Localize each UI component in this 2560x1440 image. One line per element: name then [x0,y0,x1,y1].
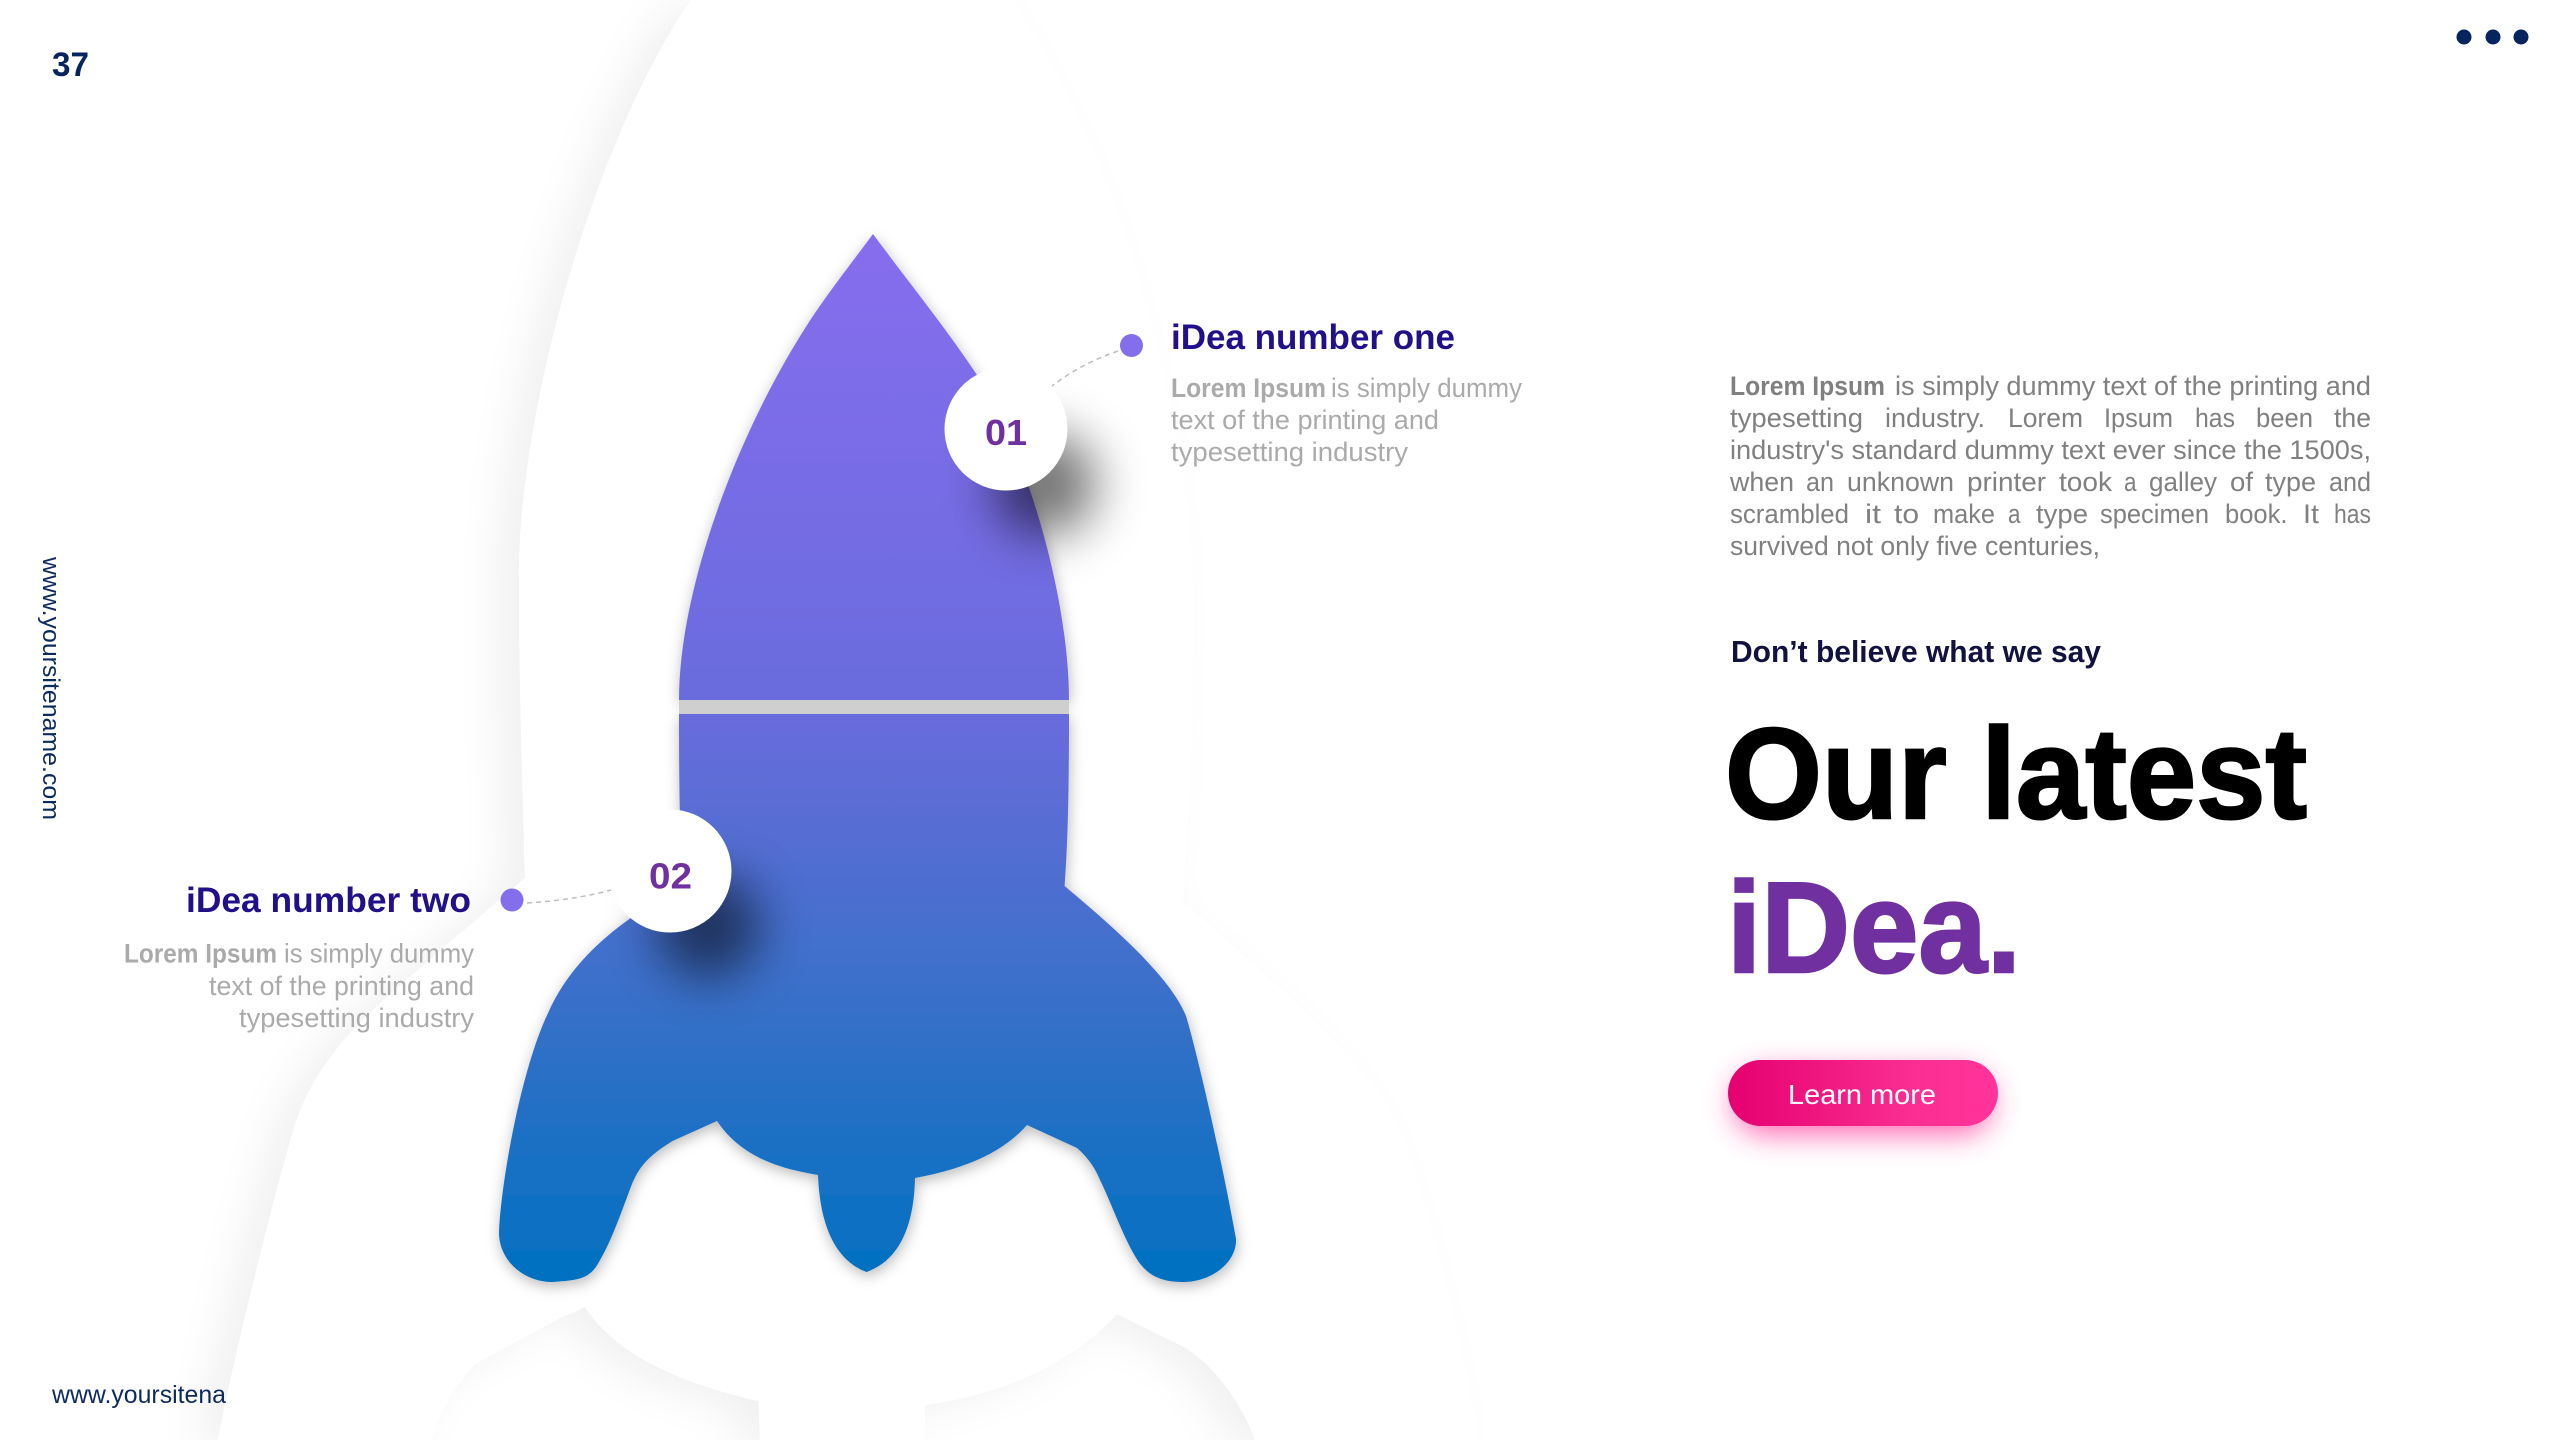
callout: idea two [124,881,475,1033]
description paragraph: unknown [1847,467,1954,497]
description paragraph: is simply dummy text of the printing and [1895,371,2371,401]
background: large white rocket with soft shadow [218,0,1478,1440]
description paragraph: industry's standard dummy text ever since the 1500s, [1730,435,2371,465]
rocket nose section [679,234,1069,700]
circle shadow 02 [656,874,760,978]
description paragraph: make [1933,499,1995,529]
callout: idea two: is simply dummy [284,938,474,968]
footer website text: www.yoursitena [51,1381,226,1409]
callout: idea two: typesetting industry [239,1003,475,1033]
menu dots [2456,30,2528,44]
connector 01 [1052,351,1118,386]
connector 02 [527,890,611,903]
description paragraph: and [2329,467,2371,497]
callout: idea two: text of the printing and [209,971,474,1001]
description paragraph: survived not only five centuries, [1730,531,2100,561]
description paragraph: industry. [1885,403,1985,433]
description paragraph: type [2036,499,2088,529]
subheading: Don’t believe what we say [1731,634,2102,669]
callout: idea one: Lorem Ipsum [1171,373,1326,403]
description paragraph: to [1894,499,1919,529]
dot 01 [1120,334,1143,357]
callout: idea one [1171,318,1522,467]
page number: 37 [52,46,89,84]
button: learn more: Learn more [1788,1079,1936,1110]
badge 01: 01 [985,412,1027,453]
callout: idea two: iDea number two [186,881,471,920]
description paragraph: type [2265,467,2316,497]
description paragraph: Lorem [2008,403,2083,433]
description paragraph: of [2230,467,2253,497]
vertical website text: www.yoursitename.com [37,556,64,820]
description paragraph: Lorem Ipsum [1730,371,1885,401]
description paragraph: it [1865,499,1882,529]
button shadow [1734,1072,1992,1134]
rocket lower body with fins [499,714,1236,1282]
description paragraph: scrambled [1730,499,1849,529]
callout: idea one: is simply dummy [1331,373,1522,403]
description paragraph: a [2124,467,2137,497]
badge 02 [608,810,732,932]
description paragraph: when [1729,467,1794,497]
description paragraph: has [2334,499,2371,529]
description paragraph: has [2195,403,2235,433]
dot 02 [500,888,524,912]
rocket illustration [499,234,1236,1282]
description paragraph: specimen [2100,499,2209,529]
description paragraph: a [2008,499,2021,529]
circle shadow 01 [992,432,1096,536]
headline: idea: iDea. [1727,856,2021,1000]
callout: idea one: text of the printing and [1171,405,1439,435]
callout: idea one: typesetting industry [1171,437,1409,467]
callout: idea one: iDea number one [1171,318,1455,357]
badge 02: 02 [649,856,692,896]
description paragraph: typesetting [1730,403,1863,433]
description paragraph: been [2256,403,2313,433]
description paragraph: an [1806,467,1834,497]
description paragraph: It [2303,499,2320,529]
badge 01 [944,368,1068,490]
description paragraph [1729,371,2371,561]
button: learn more [1728,1060,1998,1126]
description paragraph: book. [2225,499,2288,529]
description paragraph: the [2334,403,2371,433]
description paragraph: printer [1967,467,2046,497]
callout: idea two: Lorem Ipsum [124,938,277,968]
description paragraph: galley [2149,467,2217,497]
description paragraph: Ipsum [2104,403,2173,433]
rocket body gap [679,700,1069,714]
description paragraph: took [2059,467,2113,497]
headline: our latest: Our latest [1725,702,2307,846]
